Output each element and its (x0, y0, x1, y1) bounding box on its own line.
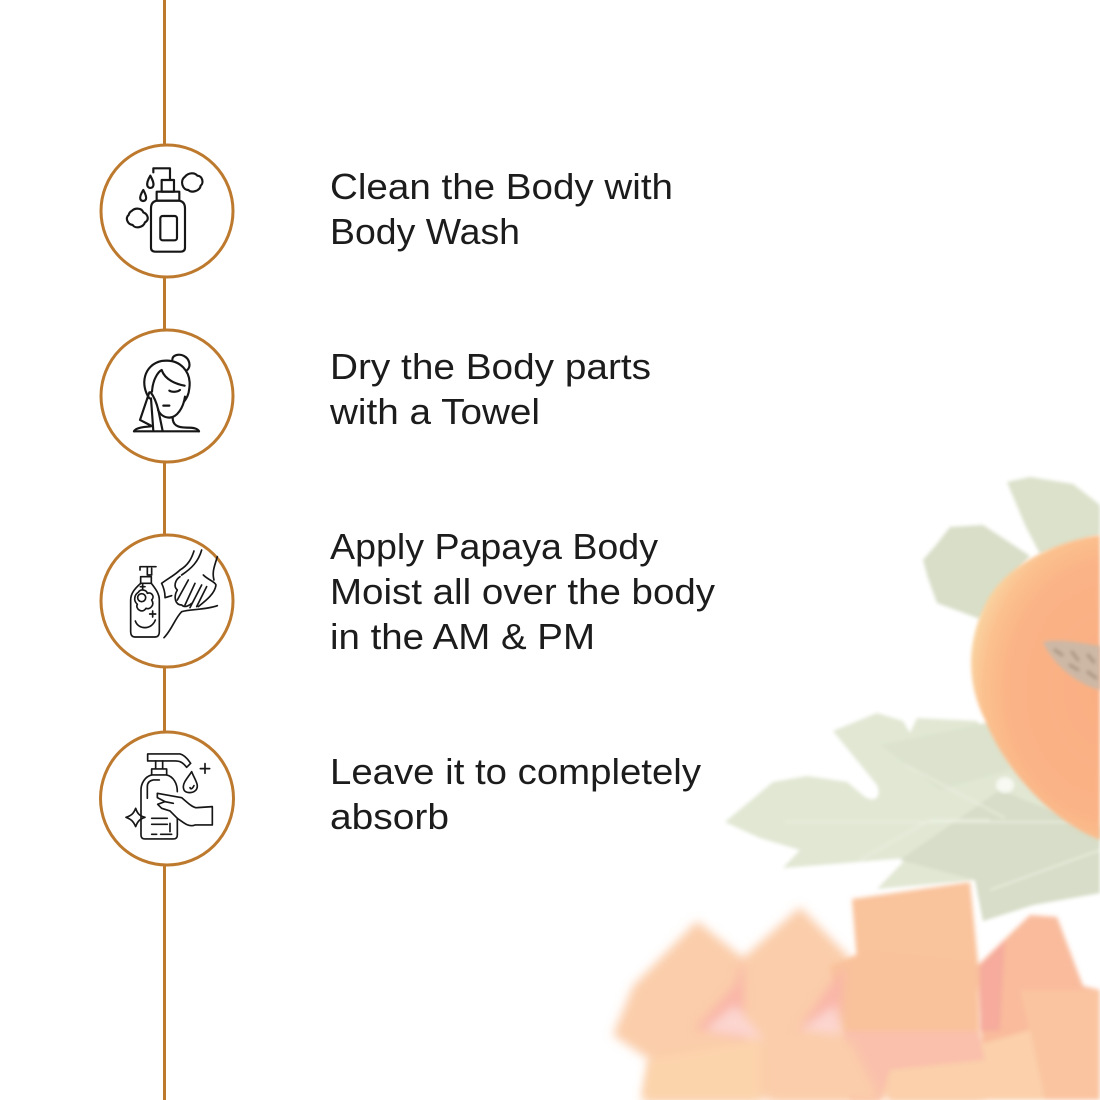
papaya seeds (1043, 641, 1100, 690)
step 3 text: Moist all over the body (330, 571, 715, 612)
step 4 text (330, 751, 701, 837)
step 2 text (329, 346, 651, 432)
timeline line (163, 0, 166, 1100)
step 3 icon: lotion applied on skin (101, 535, 233, 667)
step 1 icon: body wash bottle (101, 145, 233, 277)
papaya half (971, 535, 1100, 840)
step 1 text: Body Wash (330, 211, 520, 252)
step 3 text: Apply Papaya Body (330, 526, 658, 567)
leaf: top right (1007, 477, 1100, 554)
step 2 text: with a Towel (329, 391, 540, 432)
step 1 text (330, 166, 673, 252)
papaya cubes (613, 882, 1100, 1100)
step 2 icon: woman with towel (101, 330, 233, 462)
step 4 text: Leave it to completely (330, 751, 701, 792)
step 3 text (330, 526, 715, 657)
step 3 text: in the AM & PM (330, 616, 595, 657)
leaf: large lower (725, 713, 1100, 921)
step 4 icon: hand pressing pump bottle (100, 732, 234, 865)
step 4 text: absorb (330, 796, 449, 837)
background image: papaya and leaves (613, 477, 1100, 1100)
step 2 text: Dry the Body parts (330, 346, 651, 387)
step 1 text: Clean the Body with (330, 166, 673, 207)
leaf: upper left (923, 525, 1030, 619)
